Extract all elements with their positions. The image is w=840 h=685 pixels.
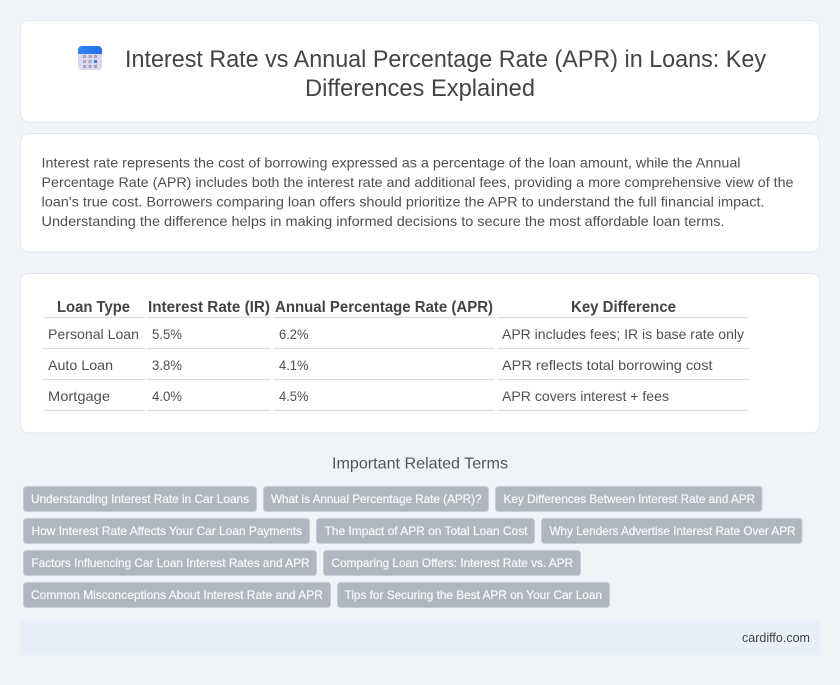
text block: summary: loan's true cost. Borrowers comparing loan offers should prioritize the APR to understand the full financial impact. — [42, 194, 764, 210]
table row: personal loan: APR includes fees; IR is base rate only — [502, 326, 744, 342]
chips: related term tags: Understanding Interest Rate in Car Loans — [31, 492, 249, 506]
table row: auto loan — [48, 357, 713, 373]
title: Interest Rate vs Annual Percentage Rate (APR) in Loans: Key — [125, 46, 766, 73]
table header: Loan Type — [57, 299, 130, 316]
table row: personal loan — [48, 326, 744, 342]
panel: summary paragraph — [20, 134, 820, 252]
footer: cardiffo.com — [742, 630, 810, 645]
chips: related term tags: The Impact of APR on Total Loan Cost — [324, 524, 528, 538]
footer — [20, 621, 820, 655]
text block: summary — [42, 154, 794, 229]
table row: auto loan: APR reflects total borrowing cost — [502, 357, 713, 373]
icon: calendar — [78, 46, 102, 70]
chips: related term tags — [24, 486, 802, 608]
text block: summary: Understanding the difference helps in making informed decisions to secure the most affordable loan terms. — [42, 213, 724, 229]
chips: related term tags: Why Lenders Advertise Interest Rate Over APR — [550, 524, 796, 538]
chips: related term tags: Comparing Loan Offers: Interest Rate vs. APR — [332, 556, 573, 570]
chips: related term tags: Key Differences Between Interest Rate and APR — [504, 492, 755, 506]
table row: personal loan: Personal Loan — [48, 326, 139, 342]
panel: header — [20, 20, 820, 122]
table row: auto loan: 3.8% — [152, 357, 182, 373]
table header: Annual Percentage Rate (APR) — [275, 299, 493, 316]
chips: related term tags: Tips for Securing the Best APR on Your Car Loan — [344, 588, 602, 602]
chips: related term tags: Factors Influencing Car Loan Interest Rates and APR — [32, 556, 310, 570]
table row: mortgage: Mortgage — [48, 388, 110, 404]
table row: personal loan: 5.5% — [152, 326, 182, 342]
panel: important related terms — [24, 456, 802, 608]
table row: auto loan: 4.1% — [279, 357, 308, 373]
table row: mortgage — [48, 388, 669, 404]
text block: summary: Interest rate represents the cost of borrowing expressed as a percentage of the loan amount, while the Annual — [42, 154, 740, 170]
table row: auto loan: Auto Loan — [48, 357, 113, 373]
table row: personal loan: 6.2% — [279, 326, 308, 342]
table header: Key Difference — [571, 299, 676, 316]
heading: related terms: Important Related Terms — [332, 456, 508, 472]
panel: comparison table — [20, 274, 820, 433]
table row: mortgage: 4.5% — [279, 388, 308, 404]
chips: related term tags: What is Annual Percentage Rate (APR)? — [271, 492, 482, 506]
table row: mortgage: APR covers interest + fees — [502, 388, 669, 404]
title: Differences Explained — [305, 75, 535, 102]
text block: summary: Percentage Rate (APR) includes both the interest rate and additional fees, providing a more comprehensive view of the — [42, 174, 794, 190]
table row: mortgage: 4.0% — [152, 388, 182, 404]
title — [125, 46, 766, 102]
table header — [57, 299, 676, 316]
chips: related term tags: Common Misconceptions About Interest Rate and APR — [31, 588, 323, 602]
chips: related term tags: How Interest Rate Affects Your Car Loan Payments — [32, 524, 302, 538]
table header: Interest Rate (IR) — [148, 299, 270, 316]
